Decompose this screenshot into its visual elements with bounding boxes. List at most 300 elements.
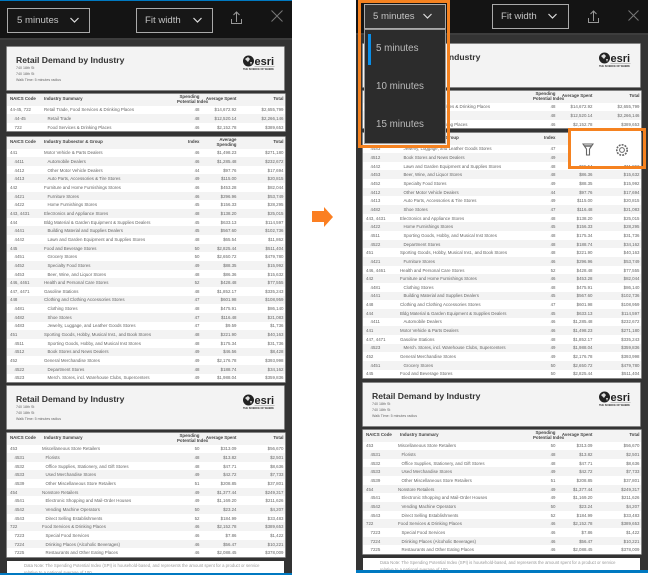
subsector table: Beer, Wine, and Liquor Stores — [48, 272, 106, 277]
retailers table: 4532 — [370, 461, 380, 466]
subsector table: Sporting Goods, Hobby, and Musical Inst Stores — [48, 341, 141, 346]
sorted subsector table: 48 — [551, 164, 556, 169]
time dropdown button: 5 minutes — [17, 14, 59, 26]
subsector table: 48 — [195, 332, 200, 337]
summary table: $2,152.78 — [573, 122, 592, 127]
retailers table: $10,221 — [624, 539, 640, 544]
subsector table: $102,736 — [265, 228, 284, 233]
sorted subsector table: 45 — [551, 311, 556, 316]
summary table: 44-45 — [14, 116, 26, 121]
sorted subsector table: $188.74 — [577, 242, 592, 247]
retailers table: Used Merchandise Stores — [46, 472, 96, 477]
summary table: Spending — [535, 91, 556, 96]
sorted subsector table: $633.13 — [577, 311, 592, 316]
retailers table: 50 — [195, 446, 200, 451]
sorted subsector table: $31,736 — [624, 233, 640, 238]
report header card: Retail Demand by Industry — [16, 55, 124, 65]
data note: Data Note: The Spending Potential Index (SPI) is household-based, and represents the amount spent for a product or service relative to a national average of 100. — [380, 560, 615, 572]
retailers table: 4541 — [14, 498, 24, 503]
retailers table: 4543 — [370, 513, 380, 518]
subsector table: $567.60 — [221, 228, 236, 233]
subsector table: General Merchandise Stores — [44, 358, 100, 363]
summary table: Potential Index — [533, 96, 564, 101]
summary table: $2,655,799 — [618, 104, 640, 109]
sorted subsector table: $479,780 — [621, 363, 640, 368]
subsector table: Home Furnishings Stores — [48, 202, 97, 207]
retailers table: $7.86 — [226, 533, 236, 538]
subsector table: $46.56 — [223, 349, 236, 354]
retailers table: 454 — [366, 487, 373, 492]
icon: share — [231, 11, 242, 24]
sorted subsector table: Other Motor Vehicle Dealers — [404, 190, 459, 195]
sorted subsector table: Furniture Stores — [404, 259, 435, 264]
subsector table: $28,295 — [268, 202, 284, 207]
second report header card: Walk Time: 5 minutes radius — [16, 416, 61, 420]
second report header card: THE SCIENCE OF WHERE — [599, 404, 630, 406]
subsector table: 444 — [10, 220, 17, 225]
highlight: filter and settings — [568, 128, 646, 169]
retailers table: $42.72 — [223, 472, 236, 477]
fit width button — [136, 8, 213, 32]
subsector table: $88.35 — [223, 263, 236, 268]
sorted subsector table: Sporting Goods, Hobby, Musical Inst., and Book Stores — [400, 250, 507, 255]
retailers table: Total — [273, 435, 284, 440]
sorted subsector table: $25,015 — [624, 216, 640, 221]
top toolbar — [356, 0, 648, 35]
subsector table: Spending — [216, 142, 236, 147]
retailers table: $56.47 — [579, 539, 592, 544]
retailers table: Electronic Shopping and Mail-Order Houses — [46, 498, 131, 503]
sorted subsector table: $40,163 — [624, 250, 640, 255]
subsector table: $393,998 — [265, 358, 284, 363]
subsector table: 4522 — [14, 367, 24, 372]
subsector table: 50 — [195, 246, 200, 251]
retailers table: Other Miscellaneous Store Retailers — [46, 481, 116, 486]
sorted subsector table: 49 — [551, 345, 556, 350]
sorted subsector table: $2,176.78 — [573, 354, 592, 359]
retailers table: $389,653 — [265, 524, 284, 529]
sorted subsector table: 4442 — [370, 164, 380, 169]
subsector table: 47 — [195, 315, 200, 320]
sorted subsector table: 451 — [366, 250, 373, 255]
subsector table: 448 — [10, 297, 17, 302]
summary table: 44-45 — [370, 113, 382, 118]
report header card: 740 18th St — [16, 72, 34, 76]
retailers table: 46 — [195, 542, 200, 547]
retailers table: NAICS Code — [10, 435, 36, 440]
retailers table: $184.99 — [221, 516, 236, 521]
summary table — [363, 91, 640, 128]
retailers table: 453 — [366, 443, 373, 448]
retailers table: 4541 — [370, 495, 380, 500]
sorted subsector table: 4522 — [370, 242, 380, 247]
subsector table: $475.91 — [221, 306, 236, 311]
retailers table: $211,626 — [266, 498, 284, 503]
second report header card: esri — [254, 394, 274, 406]
retailers table: 7225 — [14, 550, 24, 555]
retailers table: $2,088.45 — [573, 547, 592, 552]
sorted subsector table: Shoe Stores — [404, 207, 428, 212]
second report header card: 740 18th St — [16, 404, 34, 408]
retailers table: $1,377.44 — [573, 487, 592, 492]
subsector table: Auto Parts, Accessories & Tire Stores — [48, 176, 120, 181]
sorted subsector table: 48 — [551, 242, 556, 247]
icon: close — [628, 10, 639, 21]
subsector table: Other Motor Vehicle Dealers — [48, 168, 103, 173]
subsector table: Department Stores — [48, 367, 84, 372]
summary table: $389,653 — [621, 122, 640, 127]
retailers table: 4542 — [370, 504, 380, 509]
sorted subsector table: $77,555 — [624, 268, 640, 273]
retailers table: 52 — [195, 516, 200, 521]
retailers table: 46 — [551, 539, 556, 544]
sorted subsector table: 4452 — [370, 181, 380, 186]
sorted subsector table: Spending — [572, 138, 592, 143]
retailers table: $47.71 — [223, 464, 236, 469]
retailers table: Average Spent — [206, 435, 236, 440]
subsector table: $271,180 — [265, 150, 284, 155]
retailers table: 4533 — [14, 472, 24, 477]
retailers table: $1,169.20 — [217, 498, 236, 503]
sorted subsector table: 49 — [551, 354, 556, 359]
retailers table: 50 — [551, 504, 556, 509]
data note: Data Note: The Spending Potential Index (SPI) is household-based, and represents the amount spent for a product or service relative to a national average of 100. — [24, 563, 259, 575]
sorted subsector table: Specialty Food Stores — [404, 181, 446, 186]
retailers table: $33,483 — [268, 516, 284, 521]
bottom blue line — [356, 570, 648, 573]
sorted subsector table: 48 — [551, 233, 556, 238]
sorted subsector table: $1,285.48 — [573, 319, 592, 324]
retailers table: Total — [629, 432, 640, 437]
subsector table: 4442 — [14, 237, 24, 242]
sorted subsector table: $175.34 — [577, 233, 592, 238]
sorted subsector table: 44 — [551, 190, 556, 195]
subsector table: $175.34 — [221, 341, 236, 346]
retailers table: $208.85 — [221, 481, 236, 486]
sorted subsector table: Building Material and Supplies Dealers — [404, 293, 479, 298]
sorted subsector table: 45 — [551, 224, 556, 229]
retailers table: 7224 — [370, 539, 380, 544]
retailers table: 46 — [551, 530, 556, 535]
summary table: 722 — [14, 125, 22, 130]
sorted subsector table: 448 — [366, 302, 373, 307]
retailers table: $23.24 — [579, 504, 592, 509]
subsector table: Grocery Stores — [48, 254, 77, 259]
subsector table: 46 — [195, 194, 200, 199]
subsector table: $21,083 — [268, 315, 284, 320]
subsector table: $296.96 — [221, 194, 236, 199]
retailers table: 46 — [551, 521, 556, 526]
subsector table: Merch. Stores, incl. Warehouse Clubs, Supercenters — [48, 375, 150, 380]
retailers table: $8,636 — [270, 464, 284, 469]
sorted subsector table: 49 — [551, 181, 556, 186]
retailers table: 49 — [195, 490, 200, 495]
time dropdown button — [364, 4, 446, 29]
retailers table: Industry Summary — [400, 432, 439, 437]
subsector table: 46 — [195, 150, 200, 155]
subsector table: 47 — [195, 297, 200, 302]
summary table: 722 — [370, 122, 378, 127]
subsector table: Bldg Material & Garden Equipment & Supplies Dealers — [44, 220, 150, 225]
subsector table: 443, 4431 — [10, 211, 30, 216]
sorted subsector table: Health and Personal Care Stores — [400, 268, 464, 273]
time dropdown button: 5 minutes — [373, 11, 415, 22]
retailers table: Used Merchandise Stores — [402, 469, 452, 474]
retailers table: 722 — [366, 521, 373, 526]
retailers table: 46 — [195, 533, 200, 538]
time dropdown menu — [364, 29, 446, 144]
summary table: Food Services & Drinking Places — [48, 125, 111, 130]
sorted subsector table: $601.98 — [577, 302, 592, 307]
subsector table: Lawn and Garden Equipment and Supplies Stores — [48, 237, 145, 242]
retailers table: Food Services & Drinking Places — [398, 521, 462, 526]
sorted subsector table: 4441 — [370, 293, 380, 298]
retailers table: $1,422 — [626, 530, 640, 535]
retailers table: $378,009 — [265, 550, 284, 555]
sorted subsector table: Automobile Dealers — [404, 319, 442, 324]
retailers table: 4539 — [14, 481, 24, 486]
retailers table: $1,377.44 — [217, 490, 236, 495]
sorted subsector table: 47 — [551, 207, 556, 212]
sorted subsector table: $1,736 — [626, 146, 640, 151]
subsector table: 4523 — [14, 375, 24, 380]
sorted subsector table: 4422 — [370, 224, 380, 229]
retailers table: $56.47 — [223, 542, 236, 547]
subsector table: $633.13 — [221, 220, 236, 225]
highlight: time dropdown — [358, 0, 450, 148]
sorted subsector table: $1,988.04 — [573, 345, 592, 350]
retailers table: Drinking Places (Alcoholic Beverages) — [402, 539, 476, 544]
subsector table: $116.48 — [221, 315, 236, 320]
subsector table: Average — [219, 137, 236, 142]
subsector table: 45 — [195, 220, 200, 225]
retailers table: 4532 — [14, 464, 24, 469]
sorted subsector table: 4411 — [370, 319, 380, 324]
sorted subsector table: $2,650.72 — [573, 363, 592, 368]
sorted subsector table: $115.00 — [577, 198, 592, 203]
retailers table — [363, 430, 640, 554]
option: 15 minutes: 15 minutes — [376, 119, 424, 130]
second report header card: Walk Time: 5 minutes radius — [372, 414, 417, 418]
retailers table: $389,653 — [621, 521, 640, 526]
subsector table: Electronics and Appliance Stores — [44, 211, 108, 216]
retailers table: $37,801 — [268, 481, 284, 486]
summary table: Retail Trade, Food Services & Drinking Places — [400, 104, 490, 109]
subsector table: $453.28 — [221, 185, 236, 190]
sorted subsector table: 4481 — [370, 285, 380, 290]
subsector table: $108,959 — [265, 297, 284, 302]
subsector table: Furniture Stores — [48, 194, 79, 199]
top toolbar — [0, 0, 292, 40]
sorted subsector table: $108,959 — [621, 302, 640, 307]
retailers table: Direct Selling Establishments — [46, 516, 102, 521]
subsector table: Building Material and Supplies Dealers — [48, 228, 123, 233]
subsector table: 4483 — [14, 323, 24, 328]
retailers table: Other Miscellaneous Store Retailers — [402, 478, 472, 483]
sorted subsector table: 46 — [551, 319, 556, 324]
retailers table: Office Supplies, Stationery, and Gift Stores — [46, 464, 129, 469]
retailers table: $10,221 — [268, 542, 284, 547]
sorted subsector table: Merch. Stores, incl. Warehouse Clubs, Supercenters — [404, 345, 506, 350]
retailers table: $313.09 — [221, 446, 236, 451]
retailers table: Special Food Services — [402, 530, 445, 535]
report header card: esri — [610, 52, 630, 64]
retailers table: Florists — [402, 452, 416, 457]
sorted subsector table: Clothing Stores — [404, 285, 434, 290]
sorted subsector table: 4511 — [370, 233, 380, 238]
second report header card: 740 18th St — [372, 408, 390, 412]
subsector table: Total — [273, 139, 284, 144]
retailers table: 7224 — [14, 542, 24, 547]
retailers table: $211,626 — [622, 495, 640, 500]
retailers table: Electronic Shopping and Mail-Order Houses — [402, 495, 487, 500]
sorted subsector table: 46 — [551, 259, 556, 264]
retailers table: 49 — [551, 487, 556, 492]
sorted subsector table: $9.59 — [582, 146, 592, 151]
retailers table: 51 — [551, 478, 556, 483]
subsector table: 4422 — [14, 202, 24, 207]
sorted subsector table: $102,736 — [621, 293, 640, 298]
option: 5 minutes: 5 minutes — [376, 43, 418, 54]
retailers table: 4539 — [370, 478, 380, 483]
subsector table: 48 — [195, 289, 200, 294]
summary table: $389,653 — [265, 125, 284, 130]
sorted subsector table: 4483 — [370, 146, 380, 151]
subsector table: Furniture and Home Furnishings Stores — [44, 185, 121, 190]
subsector table — [7, 137, 284, 382]
retailers table: Food Services & Drinking Places — [42, 524, 106, 529]
retailers table: Potential Index — [177, 438, 208, 443]
report header card: Walk Time: 5 minutes radius — [372, 74, 417, 78]
retailers table: $42.72 — [579, 469, 592, 474]
subsector table: $25,015 — [268, 211, 284, 216]
sorted subsector table: $116.48 — [577, 207, 592, 212]
sorted subsector table: $428.48 — [577, 268, 592, 273]
retailers table: $208.85 — [577, 478, 592, 483]
sorted subsector table: $393,998 — [621, 354, 640, 359]
retailers table: $4,207 — [270, 507, 284, 512]
subsector table: $115.00 — [221, 176, 236, 181]
subsector table: 447, 4471 — [10, 289, 30, 294]
subsector table: 45 — [195, 228, 200, 233]
panel: right phone screen — [356, 0, 648, 573]
subsector table: Motor Vehicle & Parts Dealers — [44, 150, 103, 155]
arrow — [312, 207, 333, 227]
retailers table: $33,483 — [624, 513, 640, 518]
subsector table: 49 — [195, 375, 200, 380]
sorted subsector table: 46 — [551, 276, 556, 281]
sorted subsector table: $221.90 — [577, 250, 592, 255]
subsector table: 4511 — [14, 341, 24, 346]
subsector table: 49 — [195, 176, 200, 181]
sorted subsector table: Beer, Wine, and Liquor Stores — [404, 172, 462, 177]
retailers table: Restaurants and Other Eating Places — [46, 550, 118, 555]
summary table: 46 — [195, 125, 200, 130]
subsector table: $221.90 — [221, 332, 236, 337]
retailers table: 49 — [551, 495, 556, 500]
retailers table: $56,670 — [624, 443, 640, 448]
sorted subsector table: $65.54 — [579, 164, 592, 169]
subsector table: $156.33 — [221, 202, 236, 207]
summary table: Potential Index — [177, 99, 208, 104]
subsector table: 4452 — [14, 263, 24, 268]
subsector table: Food and Beverage Stores — [44, 246, 96, 251]
fit width button: Fit width — [145, 14, 181, 26]
summary table: $14,672.92 — [571, 104, 592, 109]
subsector table: 48 — [195, 272, 200, 277]
sorted subsector table: $17,694 — [624, 190, 640, 195]
subsector table: 50 — [195, 254, 200, 259]
sorted subsector table: $21,083 — [624, 207, 640, 212]
sorted subsector table: Furniture and Home Furnishings Stores — [400, 276, 477, 281]
selected indicator — [368, 34, 371, 65]
subsector table: $335,243 — [265, 289, 284, 294]
subsector table: 49 — [195, 263, 200, 268]
summary table: $2,266,146 — [618, 113, 640, 118]
retailers table: 49 — [195, 498, 200, 503]
summary table: Retail Trade — [404, 113, 427, 118]
sorted subsector table: 48 — [551, 285, 556, 290]
retailers table: Industry Summary — [44, 435, 83, 440]
retailers table: 49 — [551, 469, 556, 474]
sorted subsector table: $46.56 — [579, 155, 592, 160]
sorted subsector table: 443, 4431 — [366, 216, 386, 221]
retailers table: 48 — [195, 455, 200, 460]
report header card — [7, 47, 284, 90]
retailers table: Vending Machine Operators — [402, 504, 456, 509]
sorted subsector table: $359,836 — [621, 345, 640, 350]
subsector table: 445 — [10, 246, 17, 251]
icon: settings gear — [616, 144, 628, 156]
subsector table: 47 — [195, 323, 200, 328]
subsector table: 4453 — [14, 272, 24, 277]
report header card: THE SCIENCE OF WHERE — [599, 64, 630, 68]
retailers table: 4531 — [370, 452, 380, 457]
sorted subsector table: 4512 — [370, 155, 380, 160]
sorted subsector table: $86,140 — [624, 285, 640, 290]
retailers table: $7,733 — [626, 469, 640, 474]
retailers table: 7223 — [14, 533, 24, 538]
subsector table: 45 — [195, 202, 200, 207]
data note — [7, 561, 284, 578]
retailers table: $2,501 — [270, 455, 284, 460]
sorted subsector table: $88.35 — [579, 181, 592, 186]
subsector table: $479,780 — [265, 254, 284, 259]
sorted subsector table: 47 — [551, 146, 556, 151]
subsector table: 48 — [195, 306, 200, 311]
sorted subsector table: 49 — [551, 155, 556, 160]
sorted subsector table: $20,815 — [624, 198, 640, 203]
report header card: 740 18th St — [16, 66, 34, 70]
retailers table: NAICS Code — [366, 432, 392, 437]
subsector table: $428.48 — [221, 280, 236, 285]
retailers table: $2,152.78 — [217, 524, 236, 529]
subsector table: $359,836 — [265, 375, 284, 380]
retailers table: 52 — [551, 513, 556, 518]
sorted subsector table: $567.60 — [577, 293, 592, 298]
time dropdown button — [7, 8, 90, 32]
subsector table: 452 — [10, 358, 17, 363]
retailers table: $2,088.45 — [217, 550, 236, 555]
sorted subsector table: $28,295 — [624, 224, 640, 229]
summary table: Industry Summary — [44, 96, 83, 101]
subsector table: 4421 — [14, 194, 24, 199]
subsector table: $17,694 — [268, 168, 284, 173]
sorted subsector table: $34,162 — [624, 242, 640, 247]
retailers table: Office Supplies, Stationery, and Gift Stores — [402, 461, 485, 466]
subsector table: Automobile Dealers — [48, 159, 86, 164]
sorted subsector table: $156.33 — [577, 224, 592, 229]
